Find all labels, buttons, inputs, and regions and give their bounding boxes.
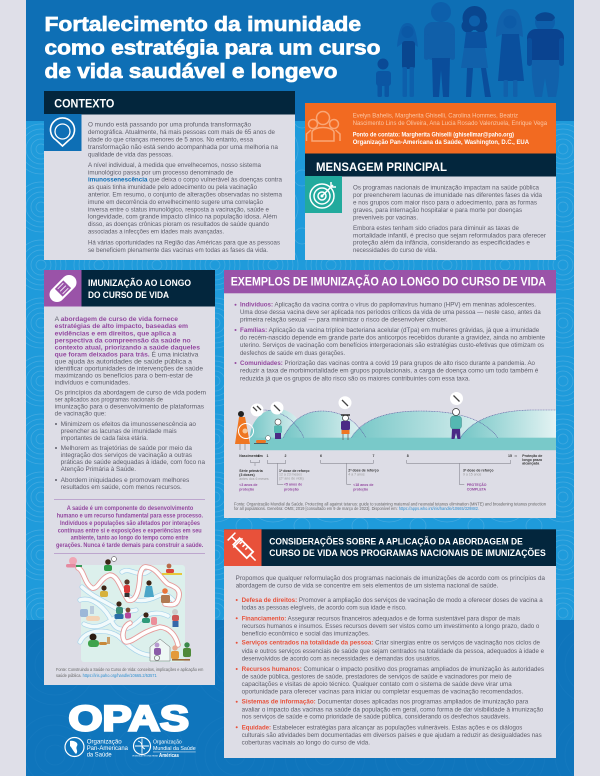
text: mensagem principal: preveníveis por vacinas.	[353, 214, 418, 221]
toddler	[274, 419, 282, 439]
list: elementos: Financiamento: Assegurar recursos financeiros adequados e de forma sustentável para dispor de mais	[242, 615, 520, 622]
panel: autores	[305, 103, 556, 154]
heading: imunização: IMUNIZAÇÃO AO LONGO	[88, 277, 191, 288]
list: exemplos: Uma dose dessa vacina deve ser aplicada nos períodos críticos da vida de uma pessoa — neste caso, antes da	[240, 309, 541, 316]
title	[44, 14, 380, 83]
logo: Organização Pan-Americana da Saúde: da Saúde	[87, 752, 112, 758]
list: elementos: Defesa de direitos: Promover a ampliação dos serviços de vacinação de modo a oferecer doses de vacina a	[242, 597, 543, 604]
text: contexto: imunológico passa por um processo denominado de	[88, 169, 234, 176]
logo: Organização Mundial da Saúde: Américas	[159, 753, 179, 759]
list: elementos: benefício econômico e social das imunizações.	[242, 630, 370, 637]
list: vacinação: integração dos serviços de vacinação a outras	[61, 452, 192, 459]
panel: considerações	[224, 529, 556, 758]
heading: considerações: CONSIDERAÇÕES SOBRE A APLICAÇÃO DA ABORDAGEM DE	[269, 536, 523, 546]
list: elementos: Recursos humanos: Comunicar o impacto positivo dos programas ampliados de imunização às autoridades	[242, 666, 544, 673]
list: exemplos: Indivíduos: Aplicação da vacina contra o vírus do papilomavírus humano (HPV) em meninas adolescentes.	[240, 302, 536, 309]
baby	[254, 436, 270, 444]
dose labels: (3 doses)	[239, 473, 255, 477]
title: de vida saudável e longevo	[44, 61, 338, 83]
text: contexto: as quais tinha imunidade pelo adoecimento ou pela vacinação	[88, 184, 258, 191]
text: contexto: demográfica. Atualmente, há mais pessoas com mais de 65 anos de	[88, 129, 276, 136]
dose labels: proteção	[284, 487, 299, 491]
maze characters	[66, 556, 191, 661]
list: elementos: avaliar o impacto das vacinas na saúde da população em geral, como forma de dar visibilidade à imunização	[242, 706, 544, 713]
text: abordagem: que foram deixados para trás. É uma iniciativa	[55, 351, 199, 358]
woman with curly hair	[461, 6, 491, 97]
illustration: people across the life course	[376, 2, 564, 97]
text: mensagem principal: e nos grupos com maior risco para o adoecimento, para as formas	[353, 200, 537, 206]
text: contexto: anterior. Em resumo, o conjunto de alterações observadas no sistema	[88, 192, 283, 198]
text: contexto: associadas a infecções em idades mais avançadas.	[88, 228, 224, 236]
girl	[397, 23, 418, 97]
list: elementos: vida e outros serviços essenciais de saúde que sejam centrados na totalidade da pessoa, adequados à idade e	[242, 648, 545, 655]
callout: saúde: humano e um recurso fundamental para esse processo.	[57, 512, 203, 519]
logo: Organização Pan-Americana da Saúde: Organização	[87, 738, 122, 745]
logo: OPAS: OPAS	[68, 699, 189, 739]
text: introdução	[236, 575, 546, 590]
text: contexto: inversa entre o status imunológico, resposta a vacinação, saúde e	[88, 206, 270, 213]
icon: target	[305, 176, 342, 213]
text: mensagem principal: Os programas nacionais de imunização impactam na saúde pública	[353, 184, 540, 192]
panel: imunização ao longo do curso de vida	[44, 270, 215, 685]
text: abordagem: imunização para o desenvolvimento de plataformas	[55, 404, 204, 411]
text: abordagem	[55, 316, 206, 418]
list: elementos: Sistemas de informação: Documentar doses aplicadas nos programas ampliados de imunização para	[242, 699, 529, 706]
list: elementos: oportunidade para oferecer vacinas para iniciar ou completar esquemas de vacinação recomendados.	[242, 688, 524, 695]
text: mensagem principal: proteção além da infância, considerando as especificidades e	[353, 240, 531, 247]
timeline ages: 7	[372, 454, 374, 458]
logo: OPAS	[65, 699, 196, 759]
list: exemplos: do recém-nascido depende em grande parte dos anticorpos recebidos durante a gravidez, ainda no ambiente	[240, 335, 546, 342]
logo: Organização Pan-Americana da Saúde: Pan-Americana	[87, 745, 128, 752]
logo: Organização Mundial da Saúde: ORGANIZAÇÃO REGIONAL PARA AS	[132, 754, 158, 758]
list: vacinação: resultados em saúde, com menos recursos.	[61, 484, 182, 491]
dose labels: <18 anos de	[353, 483, 373, 487]
icon: syringe	[224, 529, 262, 566]
list: exemplos: uterino. Serviços de vacinação com benefícios intergeracionais são estratégias custo-efetivas que otimizam os	[240, 342, 544, 349]
dose labels: proteção	[239, 487, 254, 491]
heading: contexto: CONTEXTO	[54, 98, 114, 110]
girl	[341, 415, 350, 440]
text: introdução: abordagem de curso de vida se concentre em seis elementos de um sistema nacional de saúde.	[236, 583, 499, 590]
timeline ages: 15	[508, 454, 512, 458]
heading: exemplos	[224, 270, 556, 293]
list: vacinação: Atenção Primária à Saúde.	[61, 466, 136, 473]
text: abordagem: perspectiva da compreensão da saúde no	[55, 337, 191, 344]
text: abordagem: identificar oportunidades de intervenções de saúde	[55, 366, 204, 372]
list: elementos: Serviços centrados na totalidade da pessoa: Criar sinergias entre os serviços de vacinação nos ciclos de	[242, 640, 541, 647]
dose labels: PROTEÇÃO	[467, 482, 487, 487]
heading: imunização	[44, 270, 215, 306]
heading: considerações	[224, 529, 556, 566]
text: abordagem: ser aplicados aos programas nacionais de	[55, 396, 164, 404]
dose labels: (2º ano de vida)	[279, 476, 304, 480]
callout: saúde: A saúde é um componente do desenvolvimento	[67, 505, 193, 512]
text: mensagem principal: Embora estes tenham sido criados para diminuir as taxas de	[353, 225, 520, 232]
list: vacinação: importantes de cada faixa etária.	[61, 435, 148, 442]
dose labels: COMPLETA	[467, 487, 487, 491]
timeline ages: 8	[407, 454, 409, 458]
heading: mensagem principal	[305, 154, 556, 176]
icon: group of people	[306, 112, 340, 141]
text: abordagem: que ajuda às autoridades de saúde pública a	[55, 358, 193, 366]
list: exemplos: Comunidades: Priorização das vacinas contra a covid 19 para grupos de alto risco durante a pandemia. Ao	[240, 360, 536, 367]
text: contexto: disso, as doenças crônicas pioram os resultados de saúde quando	[88, 221, 270, 228]
list: elementos: de saúde pública, gestores de saúde, prestadores de serviços de saúde e vacinadores por meio de	[242, 673, 512, 680]
logo: Organização Mundial da Saúde: Mundial da Saúde	[153, 746, 196, 752]
timeline ages: 1	[266, 454, 268, 458]
hills	[250, 409, 556, 450]
list: elementos: culturais são atividades bem documentadas em diversos países e que ajudam a reduzir as desigualdades nas	[242, 732, 542, 739]
panel: mensagem principal	[305, 154, 556, 260]
text: autores: Organização Pan-Americana da Saúde, Washington, D.C., EUA	[353, 139, 530, 146]
man	[424, 2, 455, 97]
title: Fortalecimento da imunidade	[44, 14, 361, 36]
text: autores: Ponto de contato: Margherita Ghiselli (ghisellmar@paho.org)	[353, 132, 514, 138]
text: contexto: longevidade, com grande impacto clínico na população idosa. Além	[88, 214, 277, 221]
text: mensagem principal: necessidades do curso de vida.	[353, 247, 437, 254]
dose labels: Série primária	[239, 469, 263, 473]
heading: contexto	[44, 91, 295, 114]
list: exemplos	[234, 302, 546, 382]
list: vacinação: preencher as lacunas de imunidade mais	[61, 428, 177, 435]
list: exemplos: desfechos de saúde em duas gerações.	[240, 350, 345, 357]
text: contexto: O mundo está passando por uma profunda transformação	[88, 122, 252, 128]
text: abordagem: A abordagem de curso de vida fornece	[55, 316, 179, 323]
list: exemplos: reduzida já que os grupos de alto risco são os maiores contribuintes com essa taxa.	[240, 375, 470, 382]
text: contexto: transformação não está sendo acompanhada por uma melhoria na	[88, 144, 279, 151]
panel: exemplos de imunização	[224, 270, 556, 518]
text: abordagem: Os princípios da abordagem de curso de vida podem	[55, 390, 206, 396]
text: contexto	[88, 122, 283, 254]
heading: mensagem principal: MENSAGEM PRINCIPAL	[316, 162, 447, 174]
text: abordagem: maximizando os benefícios para o bem-estar de	[55, 372, 193, 380]
chart: vaccination timeline	[235, 392, 556, 491]
timeline ages: 6	[320, 454, 322, 458]
text: abordagem: contexto atual, priorizando a saúde daqueles	[55, 344, 201, 351]
timeline brackets	[251, 460, 511, 484]
callout: saúde: ambiente, tanto ao longo do tempo como entre	[71, 535, 189, 542]
list: elementos: nos serviços de saúde e como prioridade de saúde pública, considerando os desfechos saudáveis.	[242, 714, 510, 721]
dose labels: proteção	[353, 487, 368, 491]
source: maze	[56, 667, 204, 678]
list: vacinação: práticas de saúde adequadas à idade, com foco na	[61, 459, 206, 466]
text: abordagem: estratégias de alto impacto, baseadas em	[55, 323, 189, 330]
dose labels	[239, 469, 493, 491]
text: introdução: Propomos que qualquer reformulação dos programas nacionais de imunizações de acordo com os princípios da	[236, 575, 546, 582]
illustration: life course maze	[66, 556, 191, 662]
list: exemplos: Famílias: Aplicação da vacina tríplice bacteriana acelular (dTpa) em mulheres grávidas, já que a imunidade	[240, 327, 540, 334]
callout: saúde: Indivíduos e populações são afetados por interações	[60, 520, 200, 527]
list: elementos: coberturas vacinais ao longo do curso de vida.	[242, 740, 370, 747]
callout: saúde	[56, 505, 204, 549]
list: vacinação	[55, 421, 206, 491]
source: maze: Fonte: Construindo a Saúde no Curso de Vida: conceitos, implicações e aplicação em	[56, 667, 204, 672]
list: exemplos: reduzir a taxa de morbimortalidade em grupos populacionais, a carga de doença como um todo também é	[240, 368, 539, 375]
dose labels: 2ª dose de reforço	[348, 469, 379, 473]
vaccine bubbles	[250, 392, 463, 416]
text: contexto: imunossenescência que deixa o corpo vulnerável às doenças contra	[88, 177, 283, 184]
source: chart: Fonte: Organização Mundial da Saúde. Protecting all against tetanus: guide to sustaining maternal and neonatal tetanus elimination (MNTE) and broadening tetanus protection	[234, 501, 547, 506]
timeline ages: ∞	[514, 454, 518, 458]
dose labels: <3 anos de	[239, 483, 258, 487]
dose labels: <5 anos de	[284, 483, 302, 487]
callout: saúde: gerações. Nunca é tarde demais para construir a saúde.	[56, 542, 204, 549]
list: elementos	[236, 597, 545, 747]
timeline ages: 6m	[258, 454, 263, 458]
timeline ages: Proteção de	[522, 454, 542, 458]
logo: Organização Mundial da Saúde: Organização	[153, 740, 182, 746]
title: como estratégia para um curso	[44, 38, 380, 60]
text: contexto: se beneficiem plenamente das vacinas em todas as fases da vida.	[88, 247, 268, 254]
text: abordagem: de vacinação que:	[55, 411, 106, 418]
list: vacinação: Melhorem as trajetórias de saúde por meio da	[61, 445, 193, 452]
dose labels: 3ª dose de reforço	[463, 469, 493, 473]
text: contexto: qualidade de vida das pessoas.	[88, 152, 173, 158]
text: contexto: idade do que crianças menores de 5 anos. No entanto, essa	[88, 136, 254, 144]
list: elementos: Equidade: Estabelecer estratégias para alcançar as populações vulneráveis. Estas ações e os diálogos	[242, 724, 522, 731]
text: mensagem principal: por preencherem lacunas de imunidade nas diferentes fases da vida	[353, 192, 543, 199]
older man	[527, 12, 564, 97]
list: elementos: capacitações e visitas de apoio técnico. Qualquer contato com o sistema de saúde deve virar uma	[242, 681, 512, 688]
child	[376, 58, 391, 97]
list: vacinação: Minimizem os efeitos da imunossenescência ao	[61, 421, 197, 428]
woman with long hair	[496, 9, 524, 97]
heading: considerações: CURSO DE VIDA NOS PROGRAMAS NACIONAIS DE IMUNIZAÇÕES	[269, 547, 546, 558]
source: maze: saúde pública. https://iris.paho.org/handle/10665.2/53571	[56, 673, 157, 678]
text: mensagem principal: mortalidade infantil, é preciso que sejam reformulados para oferecer	[353, 232, 546, 239]
timeline ages: 2	[284, 454, 286, 458]
mother	[235, 411, 254, 450]
icon: location pin	[44, 114, 82, 151]
panel: contexto	[44, 91, 295, 260]
text: contexto: Há várias oportunidades na Região das Américas para que as pessoas	[88, 240, 280, 246]
dose labels: 9 a 15 anos	[463, 473, 482, 477]
text: autores: Evelyn Bahelis, Margherita Ghiselli, Carolina Hommes, Beatriz	[353, 112, 518, 120]
source: chart: for all populations. Genebra: OMS; 2019 [consultado em 9 de março de 2023]. Disponível em: https://apps.who.int/iris/handle/10665/329882.	[234, 506, 479, 511]
dose labels: 1ª dose de reforço	[279, 469, 309, 473]
timeline ages	[239, 454, 542, 466]
list: elementos: desenvolvidos de acordo com as necessidades e demandas dos usuários.	[242, 656, 441, 662]
dose labels: 4 a 7 anos	[348, 473, 365, 477]
icon: bandage	[44, 270, 82, 306]
text: abordagem: evidências e em direitos, que aplica a	[55, 330, 177, 337]
heading: imunização: DO CURSO DE VIDA	[88, 289, 169, 300]
source: chart	[234, 501, 547, 511]
text: mensagem principal	[353, 184, 546, 254]
timeline ages: alcançada	[522, 462, 539, 466]
adult	[450, 408, 462, 439]
logo: Organização Mundial da Saúde	[132, 738, 196, 759]
text: contexto: imune em decorrência do envelhecimento sugere uma correlação	[88, 199, 264, 206]
list: elementos: todas as pessoas elegíveis, de acordo com sua idade e risco.	[242, 604, 407, 612]
timeline ages: Nascimento	[239, 454, 259, 458]
text: contexto: A nível individual, à medida que envelhecemos, nosso sistema	[88, 162, 262, 169]
callout: saúde: contínuas entre si e exposições e experiências em seu	[58, 527, 202, 534]
list: exemplos: primeira relação sexual — para minimizar o risco de desenvolver câncer.	[240, 316, 448, 323]
logo: Organização Pan-Americana da Saúde	[65, 738, 128, 758]
timeline ages: longo prazo	[522, 458, 542, 462]
text: mensagem principal: graves, para internação hospitalar e para morte por doenças	[353, 207, 522, 214]
dose labels: 12 a 23 meses	[279, 473, 302, 477]
text: autores	[353, 112, 548, 146]
text: autores: Nascimento Lins de Oliveira, Ana Lucia Rosado Valenzuela, Enrique Vega	[353, 120, 548, 127]
list: elementos: recursos humanos e insumos. Esses recursos devem ser vistos como um investimento a longo prazo, dado o	[242, 623, 540, 630]
text: abordagem: indivíduos e comunidades.	[55, 380, 130, 386]
dose labels: antes dos 6 meses	[239, 477, 269, 481]
list: vacinação: Abordem iniquidades e promovam melhores	[61, 477, 189, 484]
heading: exemplos: EXEMPLOS DE IMUNIZAÇÃO AO LONGO DO CURSO DE VIDA	[231, 276, 546, 288]
